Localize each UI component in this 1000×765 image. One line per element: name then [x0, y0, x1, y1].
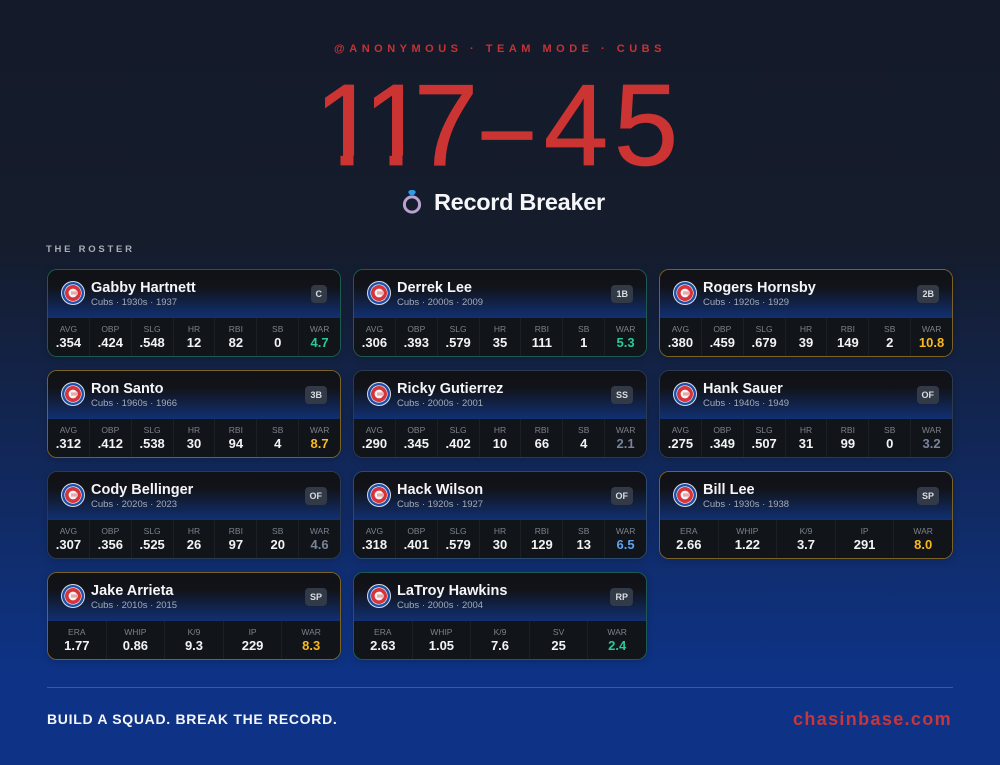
- panel: Gabby Hartnett: 12: [187, 335, 201, 350]
- panel: Cody Bellinger: RBI: [229, 526, 243, 536]
- badge: record breaker: [402, 189, 605, 215]
- panel: Ricky Gutierrez: 2.1: [617, 436, 635, 451]
- panel: Ricky Gutierrez: 4: [580, 436, 587, 451]
- panel: Rogers Hornsby: OBP: [713, 324, 731, 334]
- panel: Jake Arrieta: 0.86: [123, 638, 148, 653]
- panel: Jake Arrieta: 8.3: [302, 638, 320, 653]
- panel: Cody Bellinger: [47, 471, 341, 559]
- panel: Rogers Hornsby: SB: [884, 324, 895, 334]
- panel: Ron Santo: AVG: [60, 425, 77, 435]
- footer url: chasinbase.com: [793, 709, 952, 729]
- panel: Hack Wilson: HR: [494, 526, 506, 536]
- panel: Jake Arrieta: IP: [249, 627, 257, 637]
- record score: 5: [614, 60, 678, 190]
- panel: Cody Bellinger: AVG: [60, 526, 77, 536]
- panel: Derrek Lee: Cubs · 2000s · 2009: [397, 297, 483, 308]
- panel: Jake Arrieta: Jake Arrieta: [91, 583, 174, 599]
- panel: Rogers Hornsby: [659, 269, 953, 357]
- panel: LaTroy Hawkins: 1.05: [429, 638, 454, 653]
- panel: Hank Sauer: SLG: [756, 425, 773, 435]
- panel: Rogers Hornsby: HR: [800, 324, 812, 334]
- panel: Derrek Lee: SB: [578, 324, 589, 334]
- panel: Ricky Gutierrez: 66: [535, 436, 549, 451]
- panel: Gabby Hartnett: .354: [56, 335, 81, 350]
- panel: LaTroy Hawkins: SV: [553, 627, 564, 637]
- panel: Hank Sauer: .275: [668, 436, 693, 451]
- panel: Jake Arrieta: SP: [310, 592, 322, 602]
- panel: Hack Wilson: Cubs · 1920s · 1927: [397, 499, 483, 510]
- panel: Derrek Lee: Derrek Lee: [397, 280, 472, 296]
- panel: Jake Arrieta: Cubs · 2010s · 2015: [91, 600, 177, 611]
- panel: Cody Bellinger: WAR: [310, 526, 329, 536]
- panel: Rogers Hornsby: 39: [799, 335, 813, 350]
- panel: Derrek Lee: .579: [445, 335, 471, 350]
- panel: Ron Santo: HR: [188, 425, 200, 435]
- panel: Derrek Lee: .306: [362, 335, 387, 350]
- panel: Cody Bellinger: OBP: [101, 526, 119, 536]
- panel: Gabby Hartnett: RBI: [229, 324, 243, 334]
- panel: Ron Santo: 94: [229, 436, 243, 451]
- panel: Hank Sauer: RBI: [841, 425, 855, 435]
- panel: Derrek Lee: 111: [532, 335, 552, 350]
- panel: Hack Wilson: WAR: [616, 526, 635, 536]
- panel: Hack Wilson: OBP: [407, 526, 425, 536]
- panel: Hack Wilson: .401: [404, 537, 429, 552]
- panel: Rogers Hornsby: .380: [668, 335, 693, 350]
- panel: Ricky Gutierrez: AVG: [366, 425, 383, 435]
- panel: Bill Lee: IP: [861, 526, 869, 536]
- panel: Ron Santo: RBI: [229, 425, 243, 435]
- panel: Jake Arrieta: 1.77: [64, 638, 89, 653]
- panel: Jake Arrieta: WHIP: [124, 627, 146, 637]
- panel: Hack Wilson: RBI: [535, 526, 549, 536]
- panel: Cody Bellinger: Cubs · 2020s · 2023: [91, 499, 177, 510]
- panel: Rogers Hornsby: WAR: [922, 324, 941, 334]
- panel: Jake Arrieta: ERA: [68, 627, 86, 637]
- panel: LaTroy Hawkins: [353, 572, 647, 660]
- panel: LaTroy Hawkins: K/9: [494, 627, 506, 637]
- record score: 1: [314, 60, 379, 190]
- panel: Cody Bellinger: SB: [272, 526, 283, 536]
- panel: LaTroy Hawkins: WHIP: [430, 627, 452, 637]
- panel: Ron Santo: 4: [274, 436, 281, 451]
- panel: Hack Wilson: AVG: [366, 526, 383, 536]
- panel: Cody Bellinger: SLG: [144, 526, 161, 536]
- icon: ring: [402, 190, 422, 214]
- panel: LaTroy Hawkins: LaTroy Hawkins: [397, 583, 507, 599]
- panel: Hack Wilson: [353, 471, 647, 559]
- panel: Ricky Gutierrez: SB: [578, 425, 589, 435]
- panel: Derrek Lee: 35: [493, 335, 507, 350]
- panel: Ron Santo: SLG: [144, 425, 161, 435]
- panel: Hack Wilson: 30: [493, 537, 507, 552]
- panel: Hack Wilson: .579: [445, 537, 471, 552]
- panel: Hank Sauer: OF: [922, 390, 934, 400]
- panel: Rogers Hornsby: 2: [886, 335, 893, 350]
- panel: Hack Wilson: .318: [362, 537, 387, 552]
- record score: 7: [414, 60, 478, 190]
- panel: Gabby Hartnett: OBP: [101, 324, 119, 334]
- panel: Cody Bellinger: 20: [270, 537, 285, 552]
- panel: Gabby Hartnett: 82: [229, 335, 243, 350]
- panel: Jake Arrieta: K/9: [188, 627, 200, 637]
- panel: Gabby Hartnett: [47, 269, 341, 357]
- panel: Jake Arrieta: [47, 572, 341, 660]
- record score: [325, 60, 678, 190]
- panel: Derrek Lee: AVG: [366, 324, 383, 334]
- panel: Gabby Hartnett: HR: [188, 324, 200, 334]
- record score: 4: [544, 60, 608, 190]
- panel: Rogers Hornsby: 10.8: [919, 335, 944, 350]
- panel: Ricky Gutierrez: 10: [493, 436, 507, 451]
- panel: Cody Bellinger: .356: [98, 537, 123, 552]
- panel: Cody Bellinger: 4.6: [311, 537, 329, 552]
- panel: Bill Lee: Bill Lee: [703, 482, 755, 498]
- panel: Ricky Gutierrez: Ricky Gutierrez: [397, 381, 503, 397]
- panel: Cody Bellinger: 97: [229, 537, 243, 552]
- panel: Ricky Gutierrez: .402: [445, 436, 471, 451]
- panel: Ron Santo: Ron Santo: [91, 381, 164, 397]
- panel: Ricky Gutierrez: HR: [494, 425, 506, 435]
- panel: Ron Santo: Cubs · 1960s · 1966: [91, 398, 177, 409]
- panel: Derrek Lee: [353, 269, 647, 357]
- panel: Ron Santo: SB: [272, 425, 283, 435]
- eyebrow: @ANONYMOUS · TEAM MODE · CUBS: [334, 43, 666, 55]
- panel: Cody Bellinger: .525: [139, 537, 165, 552]
- panel: Rogers Hornsby: SLG: [756, 324, 773, 334]
- panel: Hack Wilson: OF: [616, 491, 628, 501]
- panel: Ron Santo: WAR: [310, 425, 329, 435]
- panel: Ricky Gutierrez: .345: [404, 436, 429, 451]
- panel: Bill Lee: 3.7: [797, 537, 815, 552]
- panel: Bill Lee: Cubs · 1930s · 1938: [703, 499, 789, 510]
- panel: Gabby Hartnett: AVG: [60, 324, 77, 334]
- panel: Derrek Lee: 1: [580, 335, 587, 350]
- panel: LaTroy Hawkins: 25: [551, 638, 566, 653]
- panel: Bill Lee: WHIP: [736, 526, 758, 536]
- panel: Ricky Gutierrez: OBP: [407, 425, 425, 435]
- panel: Ron Santo: 3B: [310, 390, 322, 400]
- section heading: THE ROSTER: [46, 244, 135, 255]
- panel: Ricky Gutierrez: Cubs · 2000s · 2001: [397, 398, 483, 409]
- panel: Hank Sauer: Hank Sauer: [703, 381, 783, 397]
- panel: Bill Lee: 291: [854, 537, 875, 552]
- panel: Gabby Hartnett: 0: [274, 335, 281, 350]
- panel: Ron Santo: .412: [98, 436, 123, 451]
- panel: Rogers Hornsby: .459: [710, 335, 735, 350]
- badge text: Record Breaker: [434, 189, 605, 215]
- panel: Hack Wilson: SB: [578, 526, 589, 536]
- panel: Hack Wilson: Hack Wilson: [397, 482, 483, 498]
- panel: Hank Sauer: .507: [751, 436, 777, 451]
- panel: Hank Sauer: WAR: [922, 425, 941, 435]
- panel: Rogers Hornsby: 149: [837, 335, 859, 350]
- panel: Hank Sauer: 0: [886, 436, 893, 451]
- panel: Gabby Hartnett: .424: [98, 335, 123, 350]
- panel: Bill Lee: WAR: [913, 526, 933, 536]
- panel: Ron Santo: OBP: [101, 425, 119, 435]
- panel: Cody Bellinger: HR: [188, 526, 200, 536]
- panel: Jake Arrieta: 9.3: [185, 638, 203, 653]
- panel: Gabby Hartnett: SLG: [144, 324, 161, 334]
- panel: Hack Wilson: 6.5: [617, 537, 635, 552]
- panel: Cody Bellinger: Cody Bellinger: [91, 482, 193, 498]
- panel: Hank Sauer: 31: [799, 436, 813, 451]
- panel: Cody Bellinger: OF: [310, 491, 322, 501]
- panel: Gabby Hartnett: 4.7: [311, 335, 329, 350]
- panel: Ron Santo: [47, 370, 341, 458]
- panel: Bill Lee: 2.66: [676, 537, 701, 552]
- panel: Derrek Lee: WAR: [616, 324, 635, 334]
- panel: Derrek Lee: HR: [494, 324, 506, 334]
- panel: Ricky Gutierrez: SS: [616, 390, 628, 400]
- panel: Gabby Hartnett: SB: [272, 324, 283, 334]
- panel: LaTroy Hawkins: Cubs · 2000s · 2004: [397, 600, 483, 611]
- panel: Gabby Hartnett: Gabby Hartnett: [91, 280, 196, 296]
- panel: Hank Sauer: HR: [800, 425, 812, 435]
- panel: Hank Sauer: 3.2: [923, 436, 941, 451]
- panel: Hank Sauer: OBP: [713, 425, 731, 435]
- panel: Derrek Lee: SLG: [450, 324, 467, 334]
- panel: LaTroy Hawkins: 2.63: [370, 638, 395, 653]
- panel: Rogers Hornsby: .679: [751, 335, 777, 350]
- panel: LaTroy Hawkins: 2.4: [608, 638, 626, 653]
- panel: Rogers Hornsby: RBI: [841, 324, 855, 334]
- panel: LaTroy Hawkins: ERA: [374, 627, 392, 637]
- panel: Ron Santo: 8.7: [311, 436, 329, 451]
- panel: Bill Lee: [659, 471, 953, 559]
- panel: Derrek Lee: 1B: [616, 289, 628, 299]
- record score: 1: [363, 60, 428, 190]
- panel: LaTroy Hawkins: RP: [615, 592, 628, 602]
- panel: Hack Wilson: 129: [531, 537, 553, 552]
- panel: Bill Lee: SP: [922, 491, 934, 501]
- panel: Rogers Hornsby: Cubs · 1920s · 1929: [703, 297, 789, 308]
- panel: Derrek Lee: .393: [404, 335, 429, 350]
- record score: –: [482, 60, 532, 190]
- panel: Derrek Lee: RBI: [535, 324, 549, 334]
- panel: Hank Sauer: 99: [841, 436, 855, 451]
- panel: Ron Santo: 30: [187, 436, 201, 451]
- panel: Hank Sauer: .349: [710, 436, 735, 451]
- panel: Ricky Gutierrez: RBI: [535, 425, 549, 435]
- panel: LaTroy Hawkins: WAR: [607, 627, 627, 637]
- panel: Cody Bellinger: .307: [56, 537, 81, 552]
- panel: Hack Wilson: SLG: [450, 526, 467, 536]
- panel: Ricky Gutierrez: [353, 370, 647, 458]
- panel: Hank Sauer: [659, 370, 953, 458]
- panel: Bill Lee: K/9: [800, 526, 812, 536]
- panel: Ricky Gutierrez: SLG: [450, 425, 467, 435]
- panel: Hank Sauer: SB: [884, 425, 895, 435]
- panel: Gabby Hartnett: C: [316, 289, 322, 299]
- panel: Jake Arrieta: WAR: [301, 627, 321, 637]
- panel: Rogers Hornsby: Rogers Hornsby: [703, 280, 816, 296]
- panel: Ron Santo: .538: [139, 436, 165, 451]
- panel: Ron Santo: .312: [56, 436, 81, 451]
- panel: Cody Bellinger: 26: [187, 537, 201, 552]
- panel: Jake Arrieta: 229: [242, 638, 263, 653]
- panel: Rogers Hornsby: 2B: [922, 289, 934, 299]
- panel: Hank Sauer: AVG: [672, 425, 689, 435]
- footer tagline: BUILD A SQUAD. BREAK THE RECORD.: [47, 711, 337, 727]
- panel: Derrek Lee: OBP: [407, 324, 425, 334]
- panel: Derrek Lee: 5.3: [617, 335, 635, 350]
- panel: Gabby Hartnett: .548: [139, 335, 165, 350]
- panel: Ricky Gutierrez: WAR: [616, 425, 635, 435]
- panel: Bill Lee: 8.0: [914, 537, 932, 552]
- panel: Bill Lee: ERA: [680, 526, 698, 536]
- panel: Gabby Hartnett: Cubs · 1930s · 1937: [91, 297, 177, 308]
- panel: Gabby Hartnett: WAR: [310, 324, 329, 334]
- panel: Hack Wilson: 13: [576, 537, 591, 552]
- panel: Bill Lee: 1.22: [735, 537, 760, 552]
- panel: LaTroy Hawkins: 7.6: [491, 638, 509, 653]
- panel: Rogers Hornsby: AVG: [672, 324, 689, 334]
- panel: Ricky Gutierrez: .290: [362, 436, 387, 451]
- panel: Hank Sauer: Cubs · 1940s · 1949: [703, 398, 789, 409]
